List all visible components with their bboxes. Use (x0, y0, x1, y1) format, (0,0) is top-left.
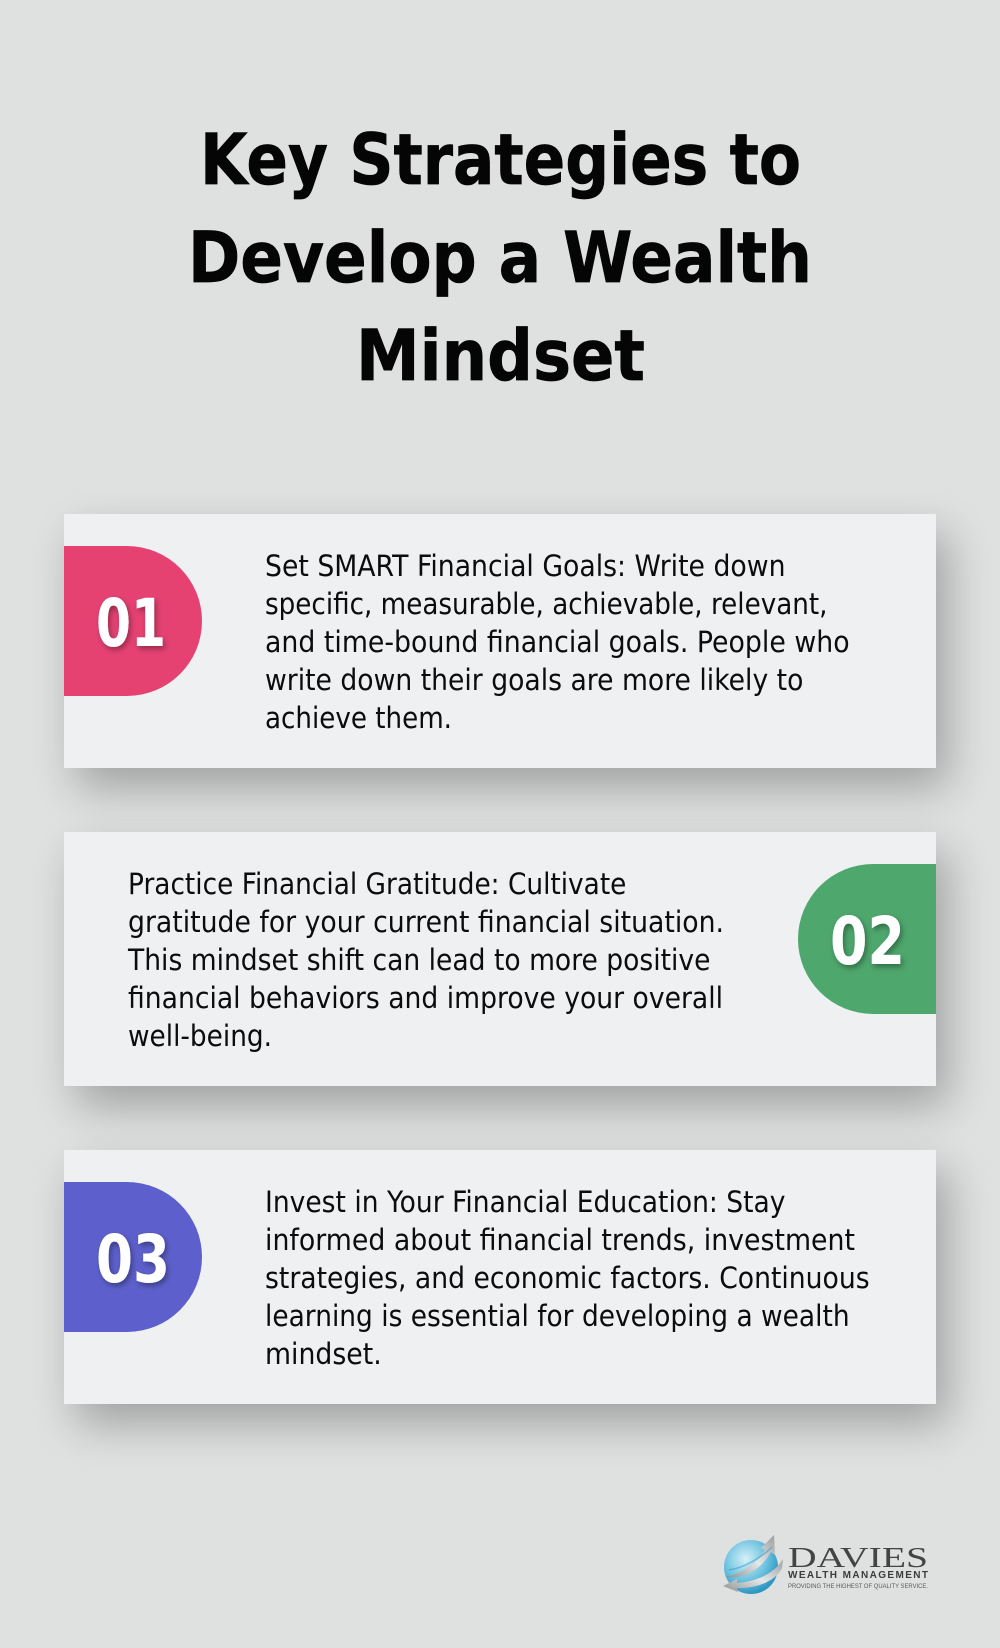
title: Develop a Wealth (188, 217, 812, 299)
text: strategy 2: This mindset shift can lead to more positive (127, 943, 710, 977)
logo wordmark: DAVIES (788, 1542, 928, 1574)
text: strategy 3: strategies, and economic factors. Continuous (265, 1261, 870, 1295)
logo subtitle: WEALTH MANAGEMENT (788, 1570, 928, 1581)
title (188, 119, 812, 397)
text: strategy 2: gratitude for your current financial situation. (128, 905, 724, 939)
logo tagline: PROVIDING THE HIGHEST OF QUALITY SERVICE. (788, 1583, 928, 1590)
text: strategy 1: specific, measurable, achievable, relevant, (265, 587, 828, 621)
badge: 02 (798, 864, 936, 1014)
text: strategy 2 (127, 867, 724, 1053)
text: strategy 1: achieve them. (265, 701, 452, 735)
panel: strategy 3 (64, 1150, 948, 1424)
logo: Davies Wealth Management (723, 1535, 928, 1594)
badge: 01 (64, 546, 202, 696)
panel: strategy 1 (64, 514, 948, 788)
text: strategy 1: and time-bound financial goals. People who (265, 625, 850, 659)
badge: 03: 03 (96, 1221, 170, 1298)
badge: 01: 01 (96, 585, 166, 662)
title: Key Strategies to (200, 119, 801, 201)
badge: 02: 02 (830, 903, 905, 980)
text: strategy 2: Practice Financial Gratitude: Cultivate (128, 867, 626, 901)
title: Mindset (356, 315, 645, 397)
panel: strategy 2 (64, 832, 948, 1106)
text: strategy 1: Set SMART Financial Goals: Write down (265, 549, 786, 583)
text: strategy 3: learning is essential for developing a wealth (265, 1299, 850, 1333)
text: strategy 3: Invest in Your Financial Education: Stay (265, 1185, 786, 1219)
text: strategy 1 (265, 549, 850, 735)
text: strategy 1: write down their goals are more likely to (265, 663, 803, 697)
text: strategy 2: well-being. (128, 1019, 272, 1053)
badge: 03 (64, 1182, 202, 1332)
text: strategy 3 (265, 1185, 870, 1371)
text: strategy 3: mindset. (265, 1337, 382, 1371)
text: strategy 3: informed about financial trends, investment (265, 1223, 855, 1257)
icon: globe with arrows (723, 1535, 783, 1594)
text: strategy 2: financial behaviors and improve your overall (128, 981, 723, 1015)
